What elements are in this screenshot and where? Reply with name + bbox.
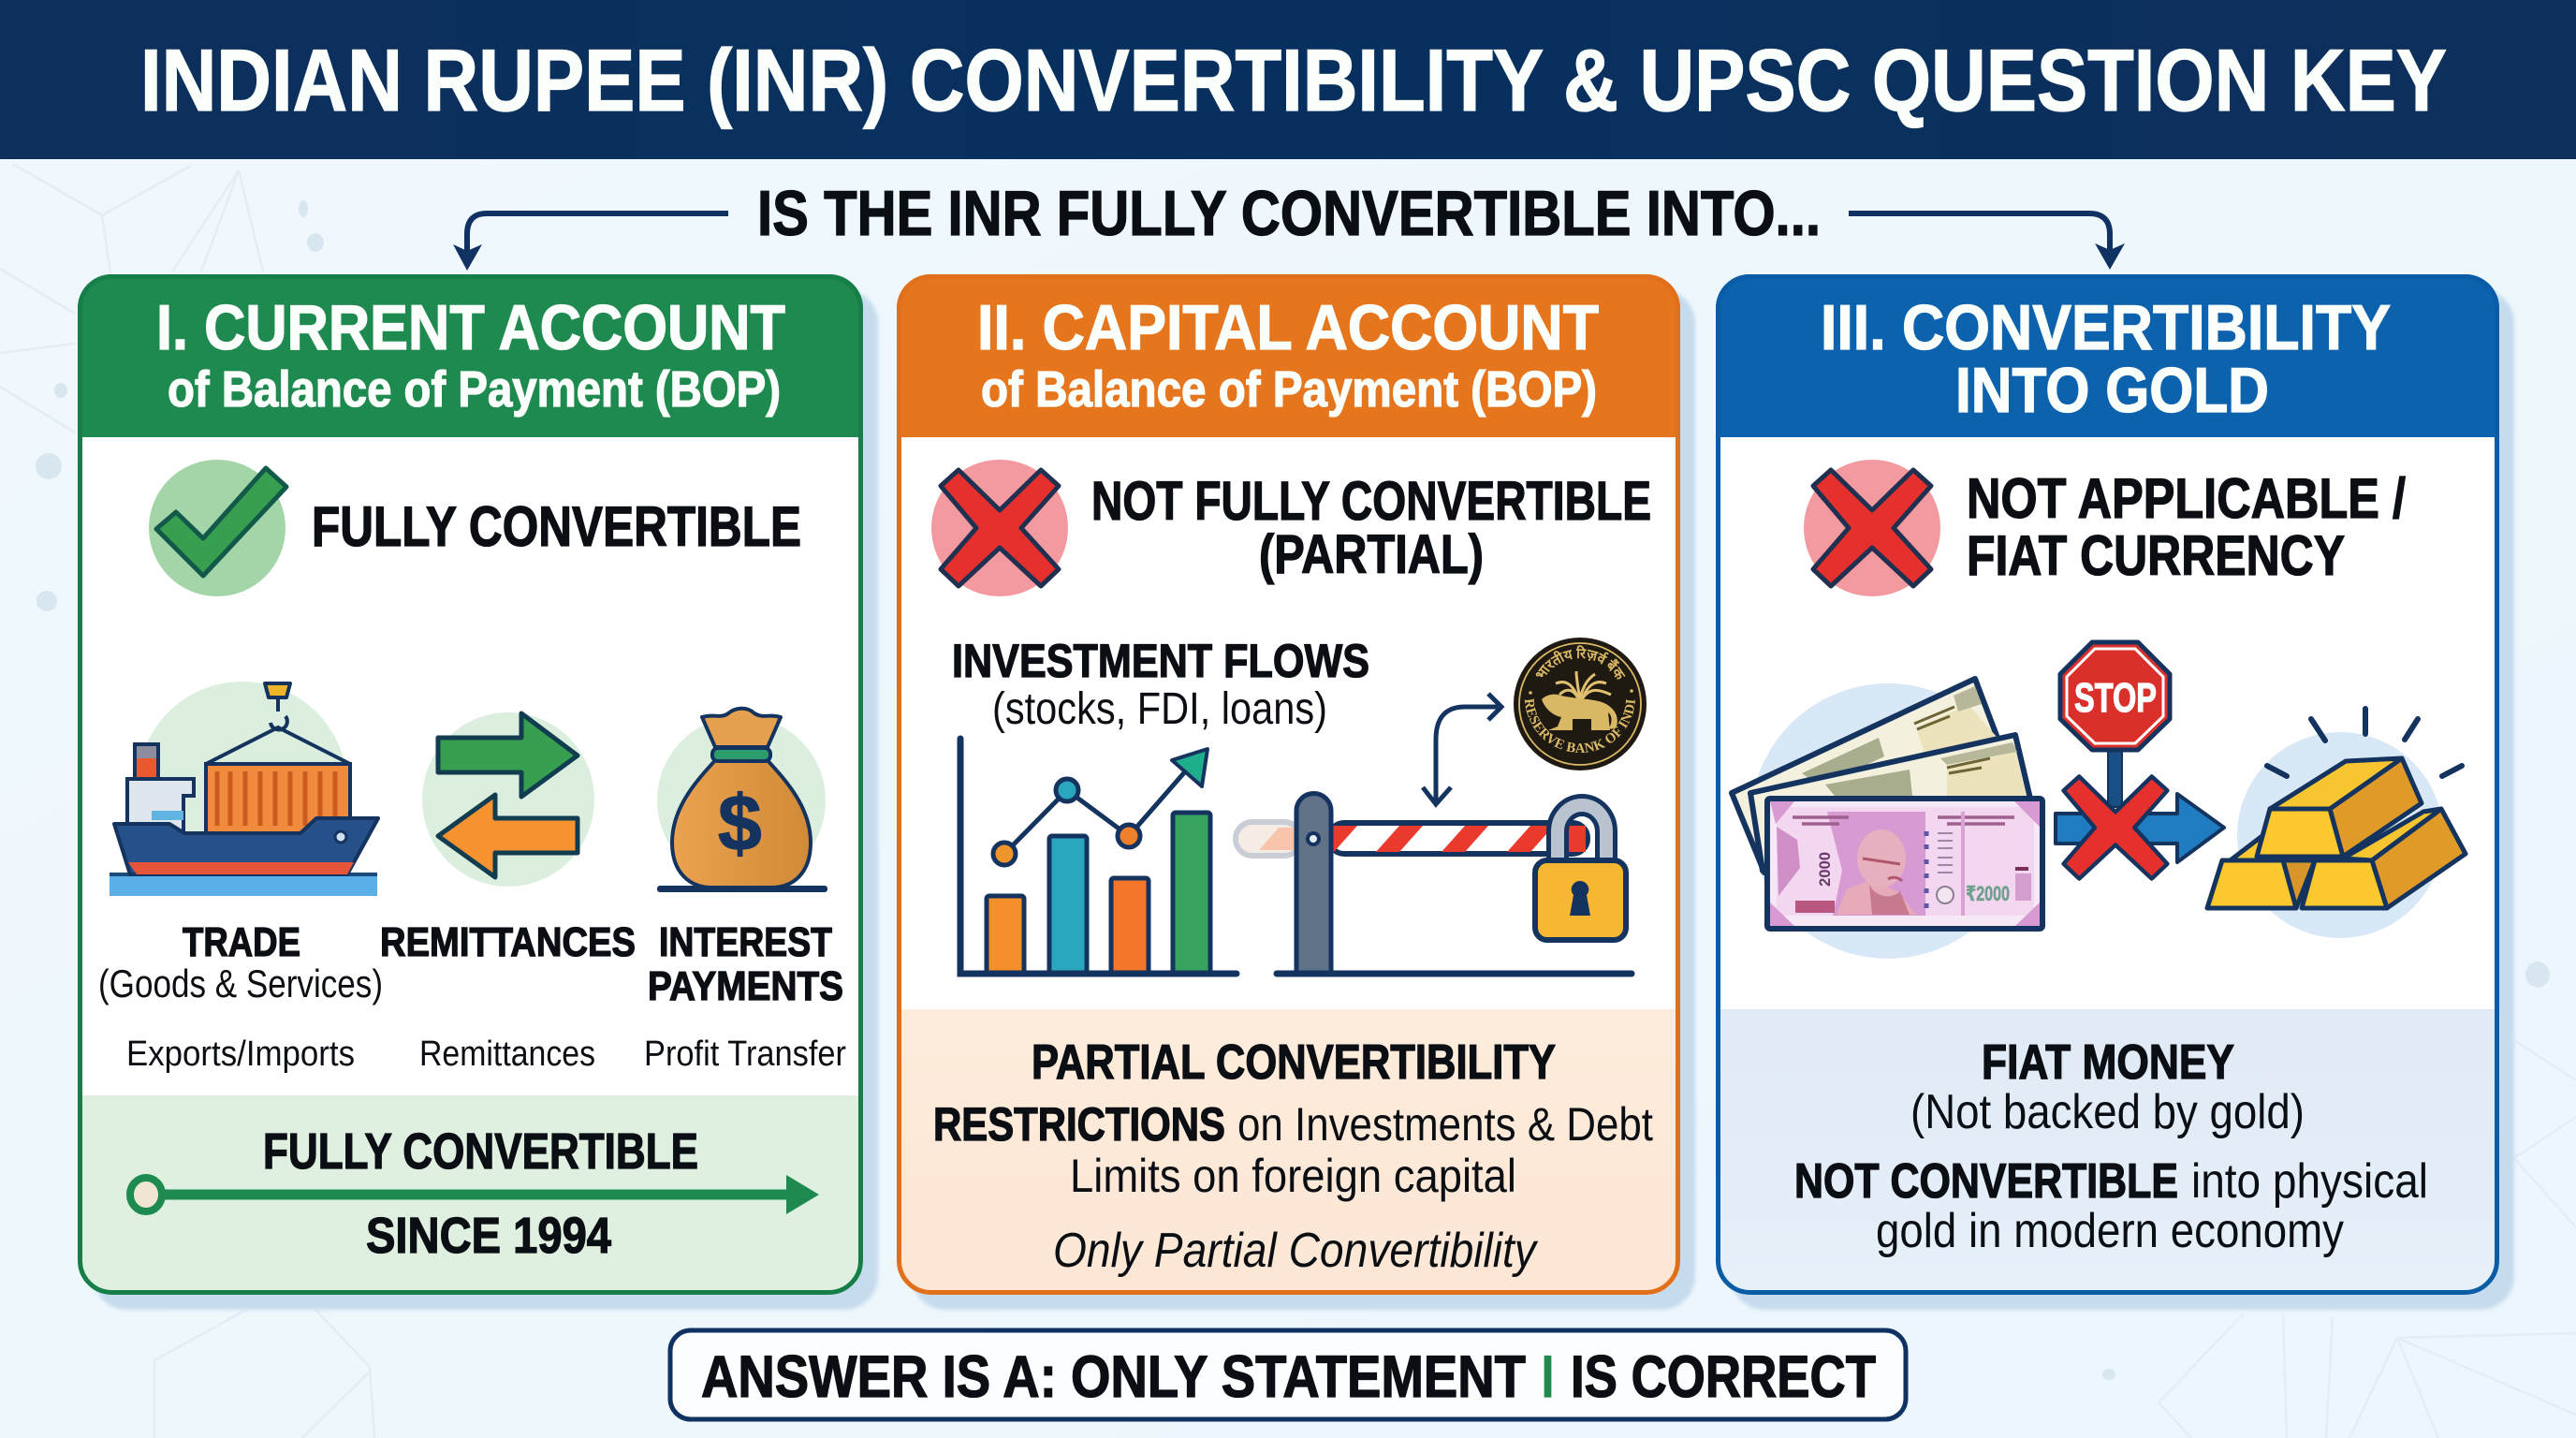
label: investment flows: (stocks, FDI, loans) (992, 684, 1327, 734)
panel heading: capital account (977, 292, 1599, 418)
footer: fiat money: (Not backed by gold) (1910, 1085, 2305, 1139)
back note (1732, 679, 2027, 873)
footer: partial convertibility: RESTRICTIONS (933, 1098, 1225, 1151)
label: interest payments: INTEREST (659, 919, 832, 965)
panel heading: current account: I. CURRENT ACCOUNT (156, 292, 785, 363)
panel heading: into gold: INTO GOLD (1955, 355, 2269, 426)
footer: partial convertibility: on Investments & Debt (1237, 1098, 1653, 1151)
panel heading: into gold (1821, 292, 2391, 426)
timeline arrow (130, 1175, 819, 1214)
footer: fiat money: NOT CONVERTIBLE (1794, 1154, 2178, 1209)
caption: profit transfer: Profit Transfer (644, 1034, 846, 1074)
panel heading: capital account: of Balance of Payment (BOP) (981, 361, 1597, 418)
title banner (0, 0, 2576, 159)
icon: rupee notes: ₹2000 (1966, 882, 2010, 905)
footer: partial convertibility: Limits on foreign capital (1070, 1150, 1516, 1202)
status: not fully convertible: NOT FULLY CONVERTIBLE (1091, 471, 1651, 532)
answer box (670, 1330, 1906, 1419)
icon: blocked arrow (2056, 749, 2224, 879)
panel: current account (78, 274, 878, 1310)
question heading: IS THE INR FULLY CONVERTIBLE INTO... (757, 178, 1821, 249)
icon: stop sign: STOP (2074, 675, 2157, 721)
panel: capital account (897, 274, 1697, 1312)
footer: fiat money: FIAT MONEY (1982, 1035, 2234, 1090)
status: not applicable: NOT APPLICABLE / (1967, 467, 2406, 530)
status: not applicable: FIAT CURRENCY (1967, 524, 2345, 587)
caption: exports/imports: Exports/Imports (126, 1034, 355, 1074)
status: not fully convertible: (PARTIAL) (1259, 524, 1484, 585)
panel: convertibility into gold (1716, 274, 2514, 1310)
icon: stop sign (2060, 642, 2170, 750)
footer: partial convertibility: PARTIAL CONVERTIBILITY (1032, 1035, 1556, 1090)
icon: barrier gate (1236, 794, 1632, 974)
arrow: RBI control (1423, 694, 1501, 804)
label: trade (98, 919, 383, 1005)
arrow: to current account (453, 213, 728, 271)
arrow: to gold (1849, 213, 2125, 270)
icon: cargo ship (110, 682, 378, 896)
label: interest payments: PAYMENTS (648, 963, 843, 1009)
label: interest payments (648, 919, 843, 1009)
footer: fully convertible: FULLY CONVERTIBLE (263, 1123, 698, 1180)
icon: rupee notes: 2000 (1816, 852, 1834, 887)
icon: green check (149, 460, 286, 596)
label: remittances: REMITTANCES (380, 919, 636, 965)
icon: Reserve Bank of India seal: RESERVE BANK OF INDIA (1524, 698, 1635, 753)
icon: remittance arrows (422, 712, 594, 887)
middle note (1750, 735, 2041, 871)
label: investment flows: INVESTMENT FLOWS (952, 635, 1369, 687)
icon: money bag: $ (718, 779, 762, 867)
footer: partial convertibility (933, 1035, 1653, 1278)
icon: red cross (931, 460, 1068, 596)
answer text: IS CORRECT (1571, 1344, 1876, 1410)
caption: remittances: Remittances (419, 1034, 595, 1074)
label: investment flows (952, 635, 1369, 734)
chart: investment growth (960, 739, 1237, 974)
footer: fiat money (1794, 1035, 2428, 1258)
footer: fiat money: gold in modern economy (1876, 1204, 2344, 1258)
panel heading: current account: of Balance of Payment (BOP) (168, 361, 781, 418)
label: trade: (Goods & Services) (98, 961, 383, 1005)
label: trade: TRADE (183, 919, 300, 965)
icon: Reserve Bank of India seal: भारतीय रिज़र्व बैंक (1535, 645, 1625, 680)
icon: padlock (1535, 805, 1626, 940)
footer: partial convertibility: Only Partial Convertibility (1053, 1224, 1539, 1278)
answer text: ANSWER IS A: ONLY STATEMENT (701, 1344, 1526, 1410)
status: not fully convertible (1091, 471, 1651, 585)
status: not applicable (1967, 467, 2406, 587)
icon: red cross (1804, 460, 1940, 596)
icon: Reserve Bank of India seal (1514, 638, 1647, 770)
panel heading: into gold: III. CONVERTIBILITY (1821, 292, 2391, 363)
icon: gold bars (2207, 709, 2466, 938)
answer text: I (1542, 1344, 1554, 1410)
panel heading: current account (156, 292, 785, 418)
icon: money bag (657, 709, 827, 892)
footer: fiat money: into physical (2191, 1154, 2428, 1209)
icon: rupee notes (1732, 679, 2042, 959)
status: fully convertible: FULLY CONVERTIBLE (312, 495, 801, 558)
panel heading: capital account: II. CAPITAL ACCOUNT (977, 292, 1599, 363)
footer: since 1994: SINCE 1994 (366, 1208, 611, 1264)
